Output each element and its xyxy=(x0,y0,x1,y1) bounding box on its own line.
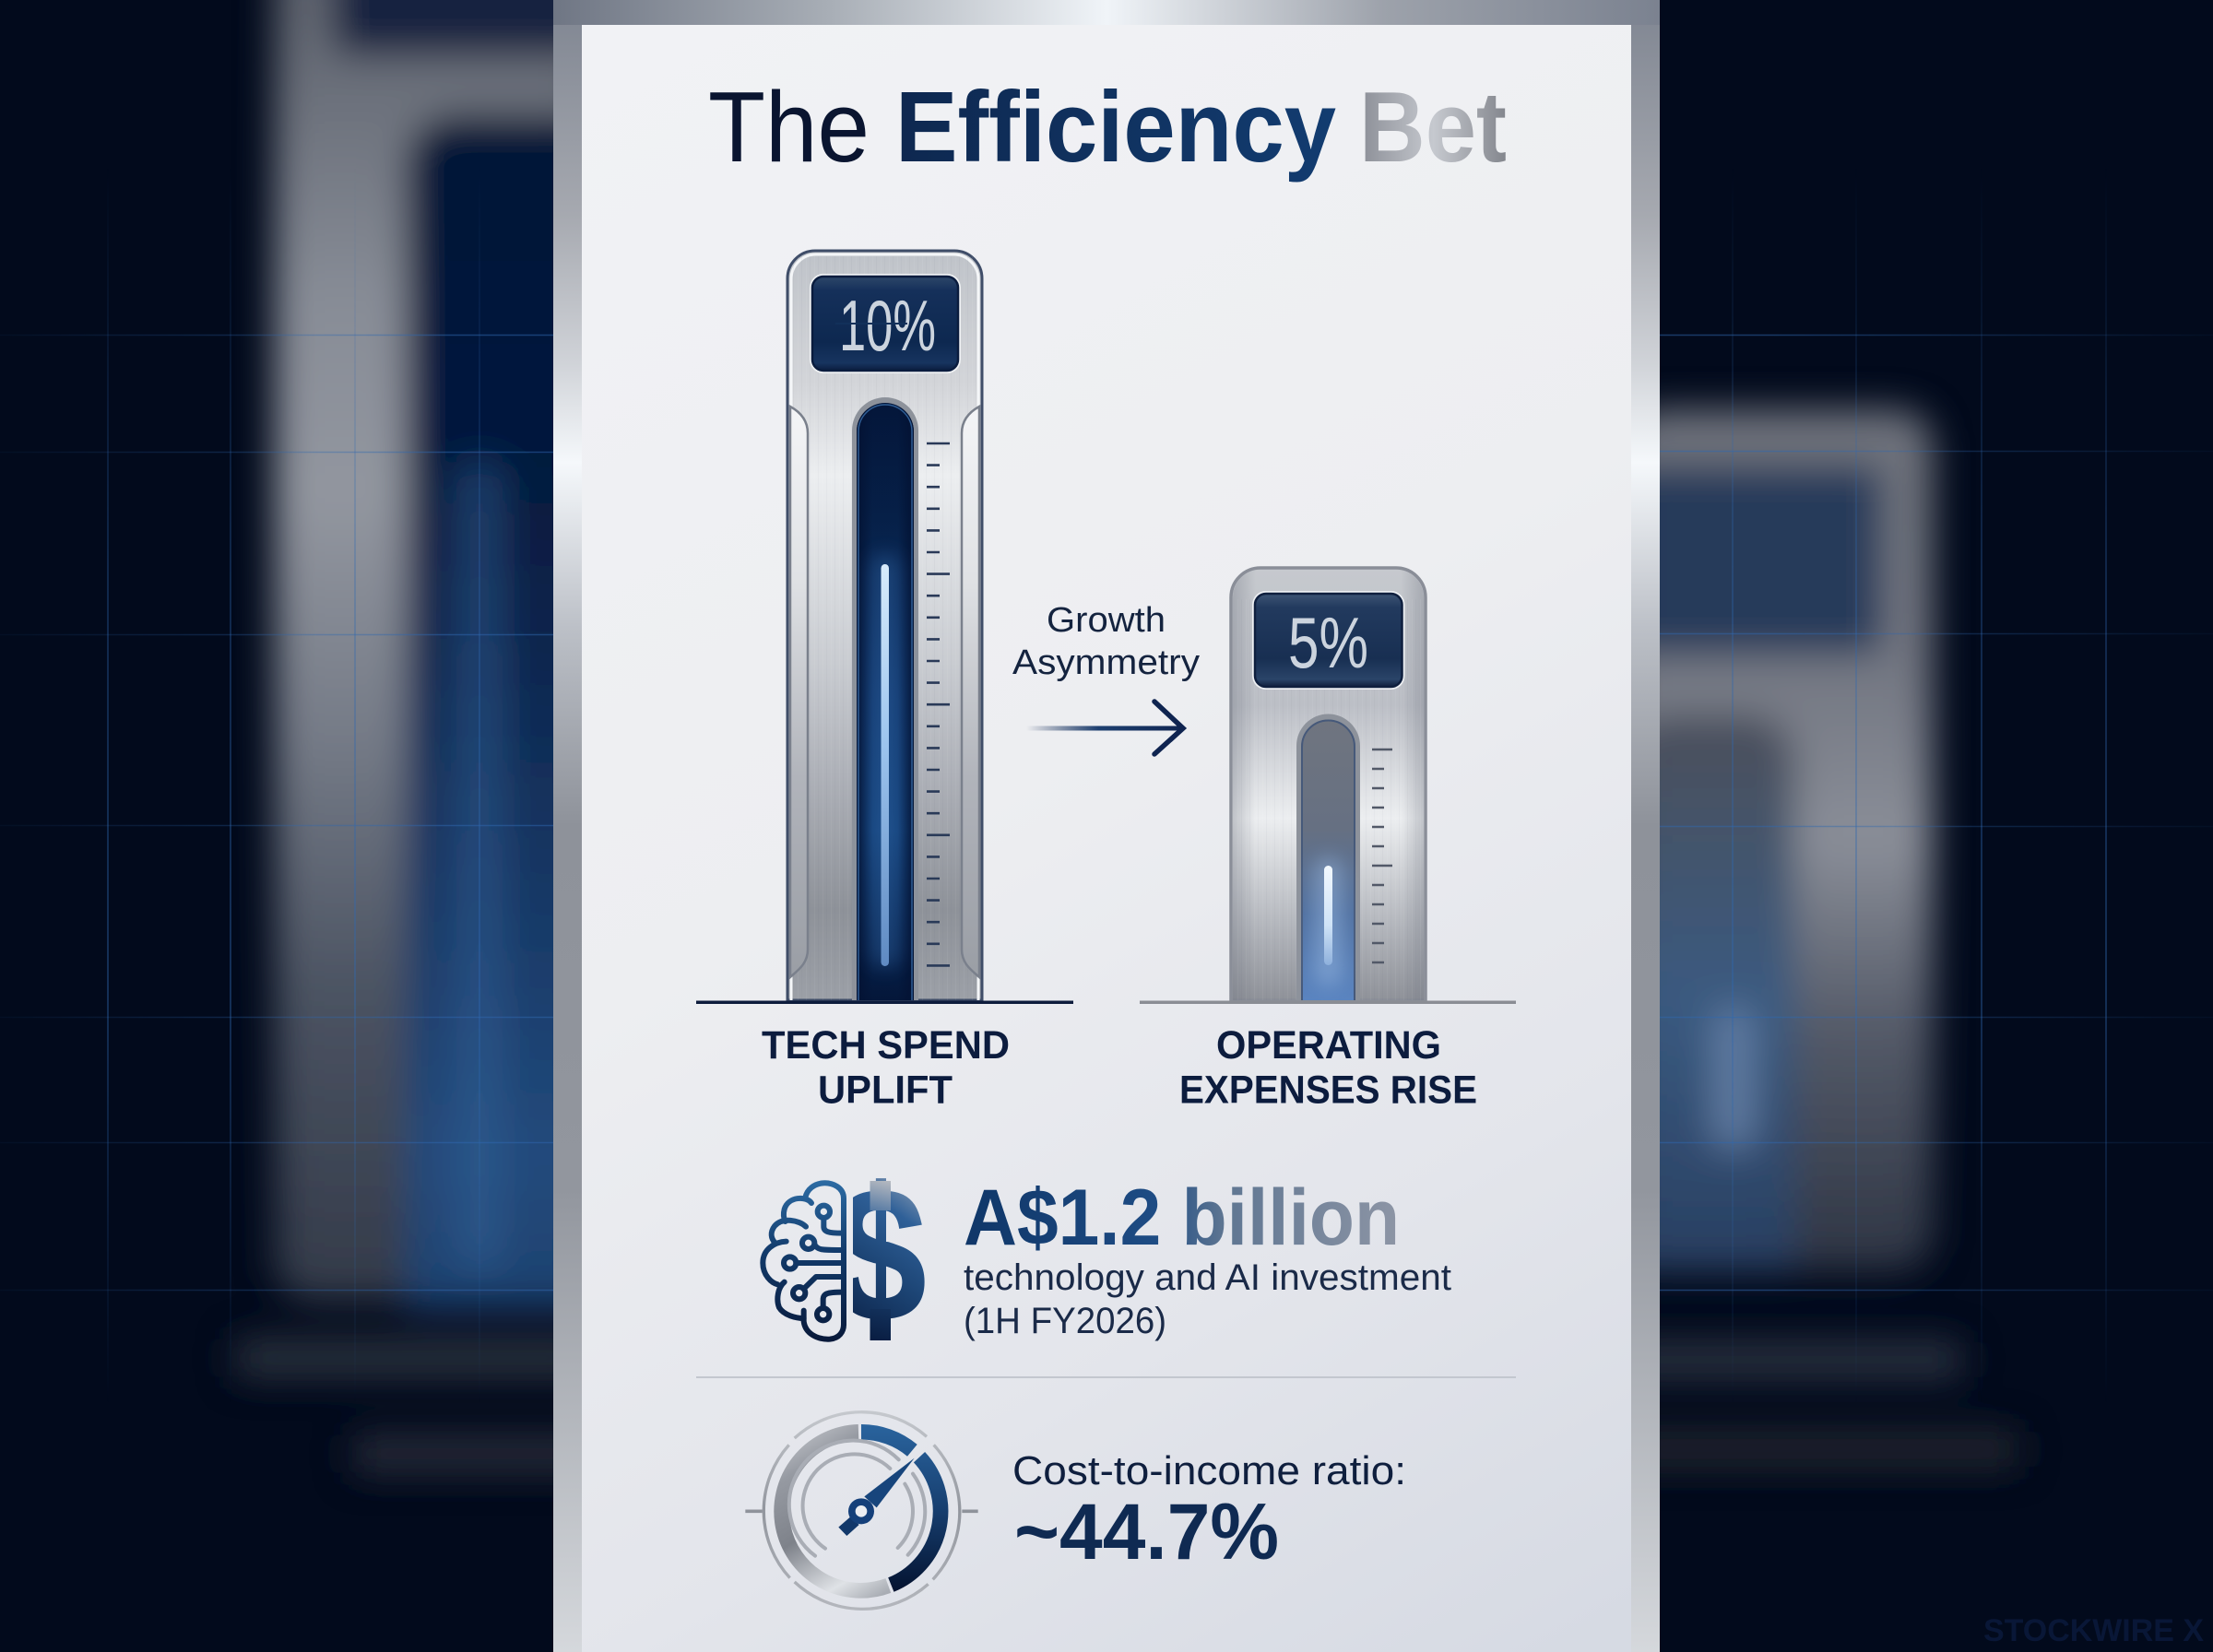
icon: gauge xyxy=(745,1412,978,1609)
title: Efficiency xyxy=(895,71,1336,183)
arrow xyxy=(1024,702,1183,754)
title xyxy=(708,71,1507,183)
baseline: tech spend xyxy=(696,1001,1073,1004)
stat: ~44.7%: ~44.7% xyxy=(1014,1488,1279,1576)
text: technology and AI investment xyxy=(964,1257,1451,1341)
stat: A$1.2 billion: A$1.2 billion xyxy=(964,1174,1400,1262)
label: operating expenses rise: EXPENSES RISE xyxy=(1179,1068,1477,1112)
title: The xyxy=(708,71,870,183)
label: growth asymmetry: Growth xyxy=(1047,601,1166,640)
text: technology and AI investment: (1H FY2026) xyxy=(964,1301,1166,1341)
divider xyxy=(696,1376,1516,1378)
bar: operating expenses gauge xyxy=(1231,568,1426,1000)
panel: light card xyxy=(582,25,1631,1652)
label: tech spend uplift: TECH SPEND xyxy=(762,1023,1010,1068)
label: operating expenses rise: OPERATING xyxy=(1216,1023,1441,1068)
brain circuit xyxy=(763,1183,844,1339)
readout display: 5%: 5% xyxy=(1288,602,1368,683)
text: technology and AI investment: technology and AI investment xyxy=(964,1257,1451,1298)
grey arc xyxy=(782,1432,888,1590)
watermark: STOCKWIRE X xyxy=(1983,1613,2204,1648)
right side strip xyxy=(962,407,979,977)
baseline: operating expenses xyxy=(1140,1001,1516,1004)
title: Bet xyxy=(1359,71,1507,183)
dollar sign: $ xyxy=(835,1148,926,1361)
needle xyxy=(838,1458,915,1536)
dollar sign xyxy=(853,1178,925,1340)
left side strip xyxy=(790,407,808,977)
blue arcs xyxy=(861,1432,941,1585)
label: operating expenses rise xyxy=(1179,1023,1477,1112)
scale ticks xyxy=(927,443,950,965)
scale ticks xyxy=(1372,749,1392,962)
readout display: 10% xyxy=(810,274,961,373)
label: tech spend uplift: UPLIFT xyxy=(818,1068,953,1112)
outer ring xyxy=(745,1412,978,1609)
label: growth asymmetry xyxy=(1012,601,1200,682)
readout display: 10%: 10% xyxy=(839,285,936,366)
tube xyxy=(852,397,918,1000)
readout display: 5% xyxy=(1252,591,1405,690)
metal frame xyxy=(553,0,1660,1652)
label: growth asymmetry: Asymmetry xyxy=(1012,643,1200,682)
label: tech spend uplift xyxy=(762,1023,1010,1112)
bar: tech spend gauge xyxy=(787,251,982,1000)
icon: brain and dollar xyxy=(760,1178,925,1342)
inner arcs xyxy=(789,1441,925,1556)
text: cost-to-income ratio: Cost-to-income ratio: xyxy=(1012,1448,1406,1493)
tube xyxy=(1296,714,1360,1000)
